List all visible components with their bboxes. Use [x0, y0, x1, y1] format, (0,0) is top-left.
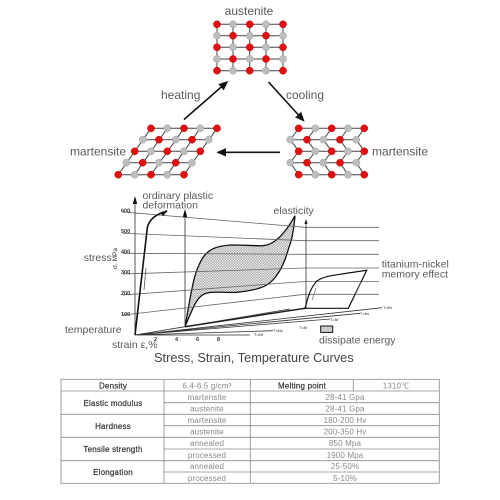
row: density: 1310℃	[383, 382, 409, 390]
row: elongation	[93, 462, 359, 483]
curve: ordinary plastic deformation	[135, 211, 167, 335]
row: hardness: 180-200 Hv	[324, 416, 366, 425]
temperature labels	[254, 306, 392, 337]
axis tick labels: 8	[217, 337, 220, 343]
row: elongation: processed	[188, 474, 226, 483]
label: ordinary plastic deformation: deformation	[142, 200, 198, 212]
label: temperature: temperature	[65, 324, 122, 336]
hysteresis loop: elasticity	[185, 216, 295, 327]
axis tick labels	[121, 208, 220, 343]
chart title: Stress, Strain, Temperature Curves	[154, 350, 354, 365]
row: tensile strength: annealed	[190, 439, 224, 448]
row: hardness: austenite	[190, 428, 224, 436]
temperature labels: T>Mf	[254, 333, 264, 337]
legend: dissipate energy swatch	[321, 326, 333, 332]
label: titanium-nickel memory effect: titanium-nickel	[382, 258, 449, 270]
row: tensile strength: processed	[188, 451, 226, 460]
axis tick labels: 200	[121, 291, 130, 297]
row: elongation: 25-50%	[331, 462, 359, 471]
row: hardness: 200-350 Hv	[324, 428, 366, 436]
temperature labels: T>As	[360, 312, 369, 316]
row: hardness	[95, 416, 366, 436]
row: elongation: 5-10%	[333, 474, 357, 483]
label: cooling: cooling	[286, 88, 324, 102]
grid lines	[123, 212, 379, 315]
axis tick labels: 400	[121, 250, 130, 256]
axis tick labels: 300	[121, 270, 130, 276]
arrow: cooling	[268, 82, 304, 120]
row: elastic modulus: martensite	[188, 393, 227, 402]
row: elongation: Elongation	[93, 468, 133, 477]
row: elongation: annealed	[190, 462, 224, 471]
row: density: 6.4-6.5 g/cm³	[182, 382, 232, 390]
lattice: sheared martensite	[115, 125, 221, 178]
axes	[135, 202, 382, 335]
axis tick labels: 100	[121, 312, 130, 318]
axis tick labels: 600	[121, 208, 130, 214]
row: elastic modulus: austenite	[190, 404, 224, 414]
base thick line	[185, 308, 305, 327]
arrow: heating	[184, 82, 227, 120]
row: density: Density	[99, 382, 127, 390]
lattice: twinned martensite	[287, 125, 368, 178]
temperature labels: T>Ms	[273, 329, 283, 333]
row: tensile strength: 850 Mpa	[329, 439, 361, 448]
row: density: Melting point	[278, 382, 327, 390]
label: elasticity: elasticity	[274, 205, 315, 217]
row: elastic modulus	[83, 393, 365, 414]
loop: titanium-nickel memory effect	[305, 270, 367, 308]
temperature labels: T<Mi	[383, 306, 392, 310]
row: tensile strength: 1900 Mpa	[327, 451, 364, 460]
label: strain: strain ε,%	[112, 339, 158, 351]
row: elastic modulus: Elastic modulus	[83, 399, 143, 408]
axis tick labels: 4	[175, 337, 179, 343]
axis tick labels: 500	[121, 229, 130, 235]
label: martensite right: martensite	[372, 144, 428, 158]
row: elastic modulus: 28-41 Gpa	[325, 404, 365, 414]
temperature labels: T>Af	[330, 318, 339, 322]
axis tick labels: 6	[196, 337, 199, 343]
label: ordinary plastic deformation: ordinary plastic	[142, 190, 213, 202]
table: material properties	[61, 379, 439, 483]
axis tick labels: 2	[154, 337, 157, 343]
row: tensile strength: Tensile strength	[83, 445, 143, 454]
label: heating: heating	[161, 88, 200, 102]
lattice: austenite	[213, 21, 287, 74]
label: dissipate energy: dissipate energy	[319, 334, 396, 346]
row: tensile strength	[83, 439, 364, 460]
temperature labels: T>Af	[299, 326, 308, 330]
label: stress: stress	[84, 252, 112, 264]
label: martensite left: martensite	[70, 144, 126, 158]
axis label: sigma MPa: σ, MPa	[112, 248, 119, 269]
row: density	[99, 382, 409, 390]
row: hardness: martensite	[188, 416, 227, 425]
row: hardness: Hardness	[95, 422, 131, 431]
label: austenite: austenite	[225, 4, 274, 18]
label: titanium-nickel memory effect: memory effect	[382, 268, 448, 280]
row: elastic modulus: 28-41 Gpa	[325, 393, 365, 402]
arrow: martensite to martensite	[218, 151, 280, 153]
chart: stress strain temperature curves	[112, 196, 392, 343]
